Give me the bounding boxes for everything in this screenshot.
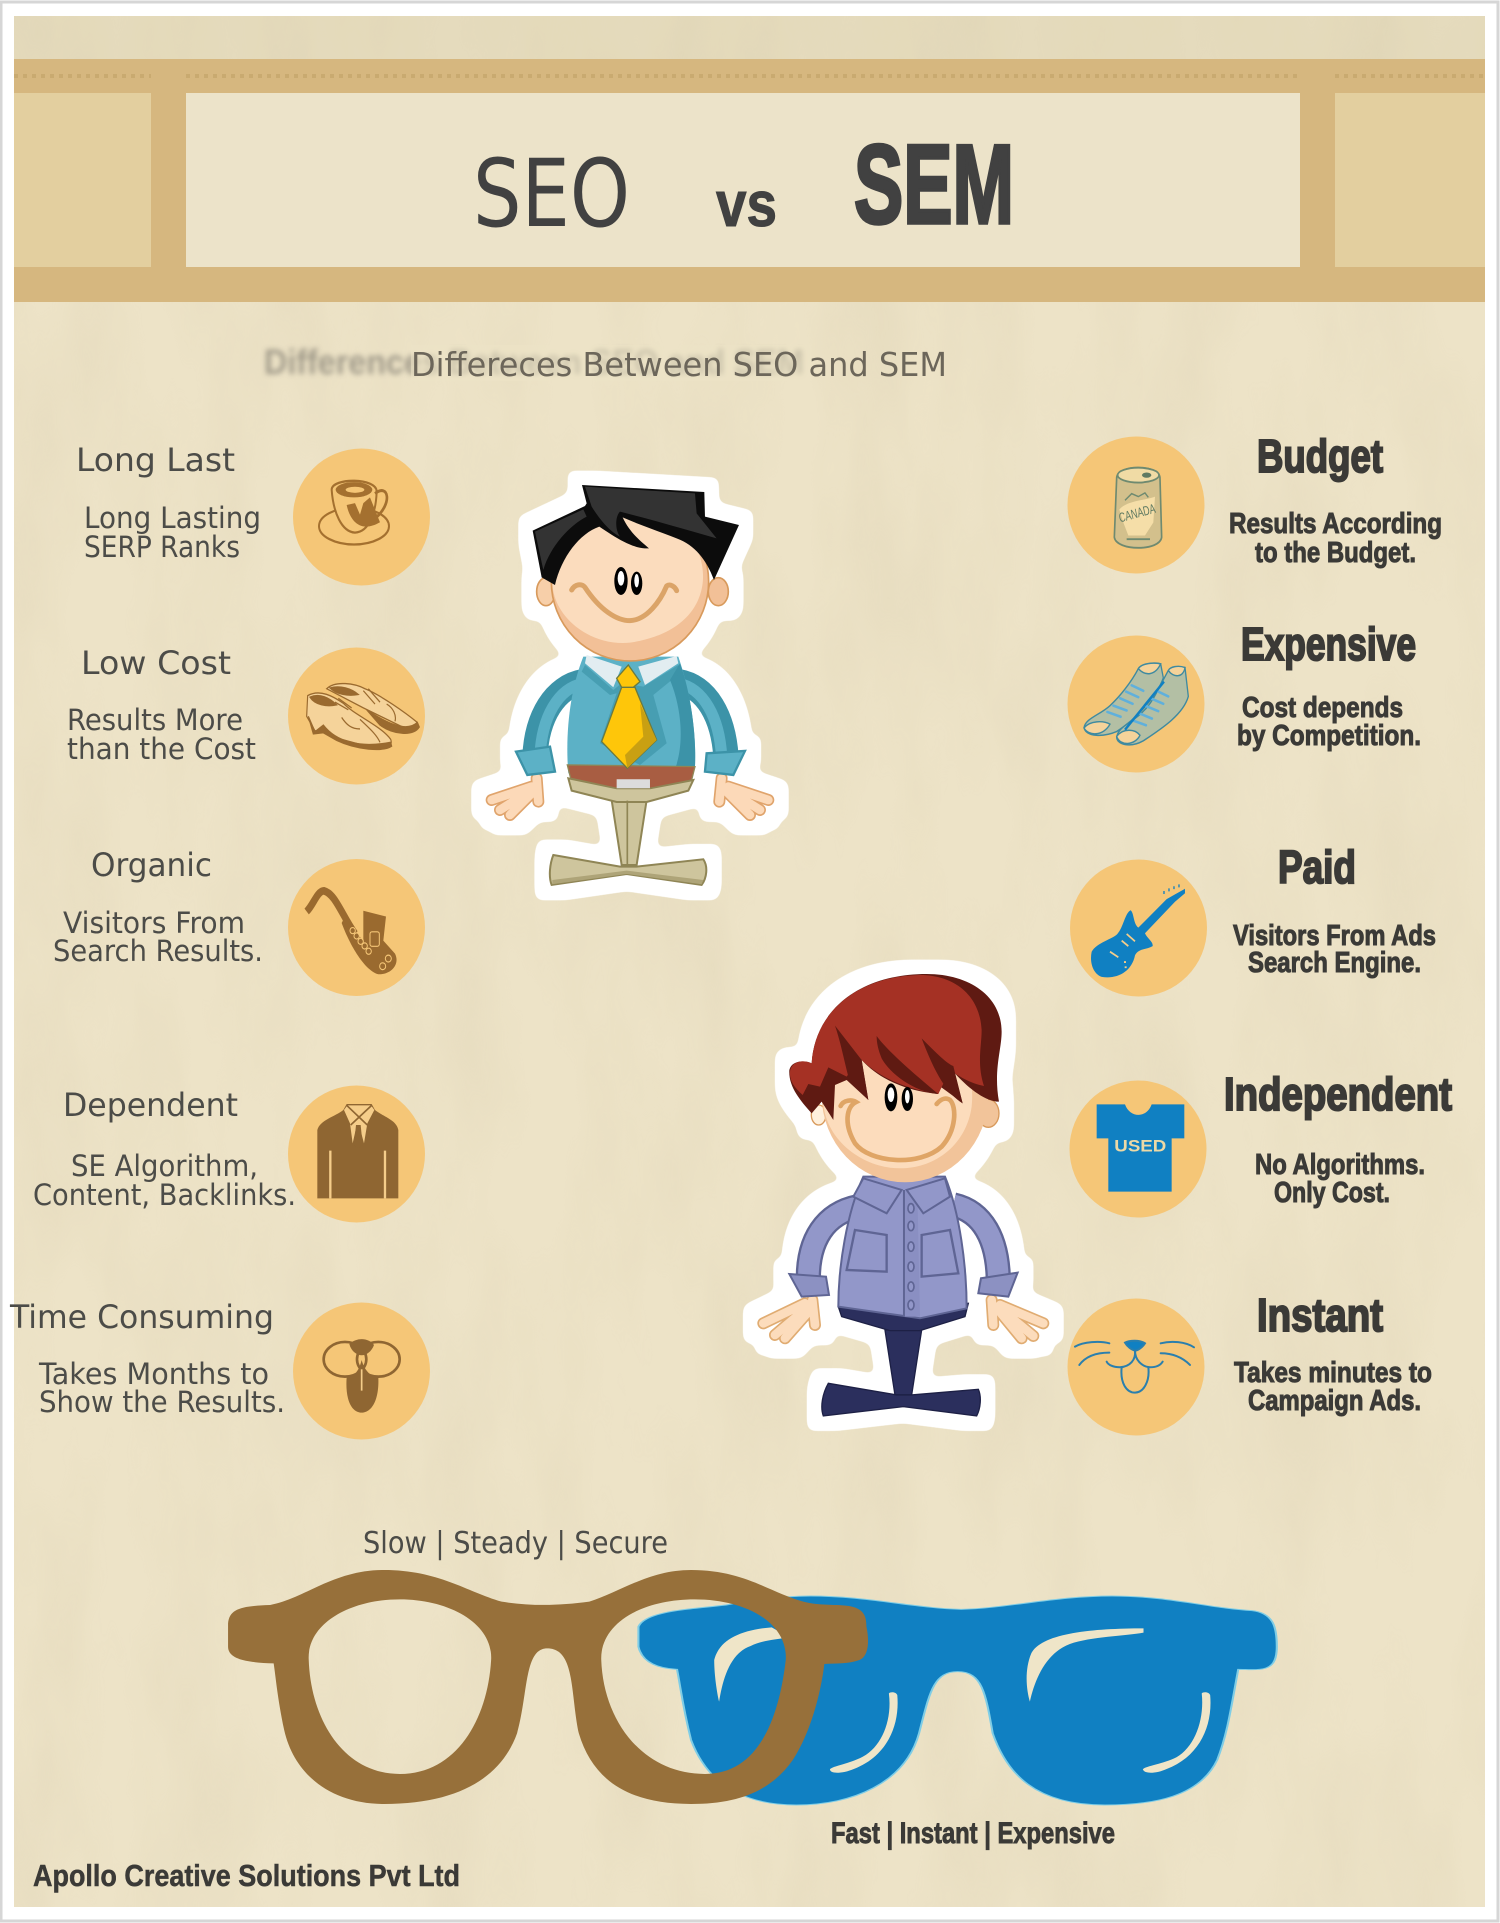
cuffs xyxy=(516,747,745,775)
collar xyxy=(853,1178,950,1213)
pockets xyxy=(847,1230,958,1277)
item: Paid: Search Engine. xyxy=(1248,947,1421,979)
item: Instant xyxy=(1234,1289,1432,1417)
item: Low Cost xyxy=(67,644,256,766)
item: Time Consuming: Takes Months to xyxy=(38,1357,269,1391)
head xyxy=(551,502,709,661)
cuffs xyxy=(789,1273,1018,1297)
item: Time Consuming xyxy=(9,1298,285,1419)
subtitle with blurred shadow text: Differeces Between SEO and SEM xyxy=(411,345,947,384)
character: SEO man with yellow tie xyxy=(492,485,768,885)
item: Expensive xyxy=(1237,618,1421,752)
ears xyxy=(811,1105,826,1125)
item: Paid: Paid xyxy=(1278,841,1356,893)
collar xyxy=(585,655,678,687)
icon: brogue shoes xyxy=(288,648,425,784)
item: Dependent xyxy=(33,1086,296,1212)
item: Organic: Organic xyxy=(91,846,212,884)
icon: dog snout xyxy=(293,1302,430,1440)
item: Dependent: Dependent xyxy=(63,1086,238,1124)
title: vs xyxy=(716,168,777,240)
icon: USED t-shirt xyxy=(1070,1080,1206,1218)
item: Budget: to the Budget. xyxy=(1255,537,1416,569)
eyes xyxy=(885,1083,897,1111)
item: Organic: Search Results. xyxy=(53,934,263,968)
item: Expensive: Cost depends xyxy=(1242,692,1403,724)
icon: coffee cup xyxy=(293,448,430,586)
item: Budget: Budget xyxy=(1257,430,1383,482)
icon: USED t-shirt: USED xyxy=(1114,1136,1166,1155)
header banner xyxy=(14,59,1485,302)
arms xyxy=(808,1205,998,1278)
glasses illustration xyxy=(228,1570,1277,1805)
item: Expensive: by Competition. xyxy=(1237,720,1421,752)
blue sunglasses xyxy=(638,1596,1277,1805)
item: Independent xyxy=(1224,1068,1452,1209)
icon: sneakers xyxy=(1068,636,1204,772)
item: Paid xyxy=(1233,841,1436,979)
belt xyxy=(567,765,695,788)
shirt torso xyxy=(838,1177,967,1318)
item: Time Consuming: Show the Results. xyxy=(39,1385,285,1419)
item: Independent: Only Cost. xyxy=(1274,1177,1390,1209)
tie xyxy=(602,665,657,768)
item: Paid: Visitors From Ads xyxy=(1233,920,1436,952)
item: Independent: No Algorithms. xyxy=(1255,1149,1425,1181)
panel: SEO left text column xyxy=(9,441,296,1419)
item: Organic: Visitors From xyxy=(63,906,245,940)
item: Low Cost: Low Cost xyxy=(81,644,231,682)
item: Long Last xyxy=(76,441,261,564)
icon: soda can: CANADA xyxy=(1117,501,1157,526)
item: Long Last: SERP Ranks xyxy=(84,530,240,564)
item: Dependent: SE Algorithm, xyxy=(71,1149,258,1183)
hair xyxy=(533,485,739,585)
title: SEM xyxy=(854,122,1014,247)
icon: cat face xyxy=(1068,1298,1204,1436)
item: Expensive: Expensive xyxy=(1241,618,1416,670)
left hand xyxy=(492,778,538,815)
icon: soda can xyxy=(1068,436,1204,574)
item: Dependent: Content, Backlinks. xyxy=(33,1178,296,1212)
item: Instant: Campaign Ads. xyxy=(1248,1385,1421,1417)
eyes xyxy=(614,567,628,595)
item: Instant: Instant xyxy=(1257,1289,1383,1341)
smile xyxy=(572,585,677,621)
icon: electric guitar xyxy=(1070,860,1207,996)
right hand xyxy=(719,778,768,815)
item: Long Last: Long Last xyxy=(76,441,235,479)
item: Budget xyxy=(1229,430,1442,569)
glasses caption: SEO traits: Slow | Steady | Secure xyxy=(363,1526,668,1561)
item: Budget: Results According xyxy=(1229,508,1442,540)
icon: jacket xyxy=(288,1086,425,1222)
title: SEO xyxy=(473,140,630,249)
title xyxy=(473,122,1014,249)
left hand xyxy=(763,1300,815,1338)
glasses caption: SEM traits: Fast | Instant | Expensive xyxy=(831,1817,1115,1850)
legs and feet xyxy=(550,778,706,885)
subtitle with blurred shadow text: Differences Between SEO and SEM xyxy=(264,343,804,382)
arms xyxy=(535,682,726,757)
hair xyxy=(789,974,1002,1120)
character: SEM man with red hair xyxy=(763,974,1043,1416)
item: Low Cost: than the Cost xyxy=(67,732,256,766)
ears xyxy=(537,578,555,606)
item: Independent: Independent xyxy=(1224,1068,1452,1120)
trousers and shoes xyxy=(822,1303,980,1416)
shirt torso xyxy=(567,657,695,778)
head xyxy=(822,1008,988,1182)
item: Instant: Takes minutes to xyxy=(1234,1357,1432,1389)
smile xyxy=(841,1099,954,1160)
item: Low Cost: Results More xyxy=(67,703,243,737)
placket and buttons xyxy=(903,1190,920,1317)
icon: saxophone xyxy=(288,859,425,996)
right hand xyxy=(992,1300,1043,1338)
item: Time Consuming: Time Consuming xyxy=(9,1298,274,1336)
brown frames xyxy=(228,1570,868,1804)
company name: Apollo Creative Solutions Pvt Ltd xyxy=(33,1858,460,1893)
panel: SEM right text column xyxy=(1224,430,1452,1417)
item: Organic xyxy=(53,846,263,968)
item: Long Last: Long Lasting xyxy=(84,501,261,535)
